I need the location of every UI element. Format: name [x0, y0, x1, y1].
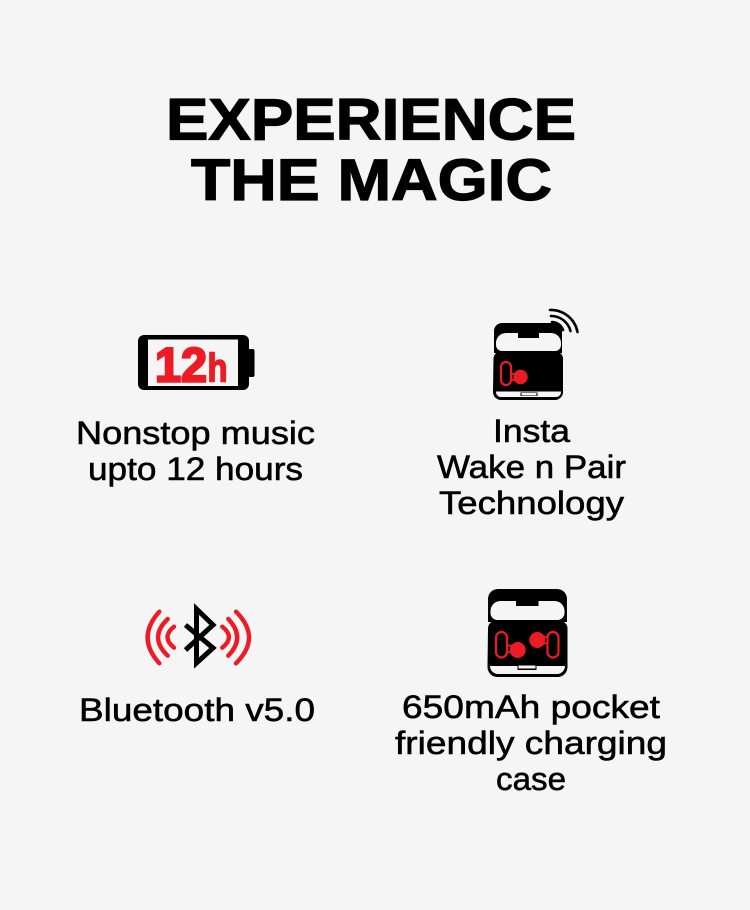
text: insta wake n pair: Wake n Pair: [437, 449, 626, 485]
text: charging case: friendly charging: [395, 725, 667, 761]
icon: open charging case: [488, 589, 568, 677]
text: insta wake n pair: Insta: [493, 413, 570, 449]
text: nonstop music: upto 12 hours: [88, 451, 303, 487]
text: charging case: case: [496, 761, 566, 797]
icon: case with wireless signal: [493, 310, 578, 400]
text: insta wake n pair: [437, 413, 626, 521]
text: nonstop music: Nonstop music: [76, 415, 315, 451]
icon: battery 12h: [138, 335, 254, 392]
icon: battery 12h: 12: [155, 340, 207, 392]
text: bluetooth version: Bluetooth v5.0: [79, 692, 315, 728]
text: charging case: 650mAh pocket: [402, 689, 660, 725]
text: nonstop music: [76, 415, 315, 487]
text: insta wake n pair: Technology: [439, 485, 624, 521]
text: charging case: [395, 689, 667, 797]
title: THE MAGIC: [191, 148, 552, 213]
title: EXPERIENCE: [166, 88, 576, 152]
title: [166, 88, 576, 213]
icon: battery 12h: h: [208, 346, 228, 390]
icon: bluetooth signal: [148, 609, 249, 663]
